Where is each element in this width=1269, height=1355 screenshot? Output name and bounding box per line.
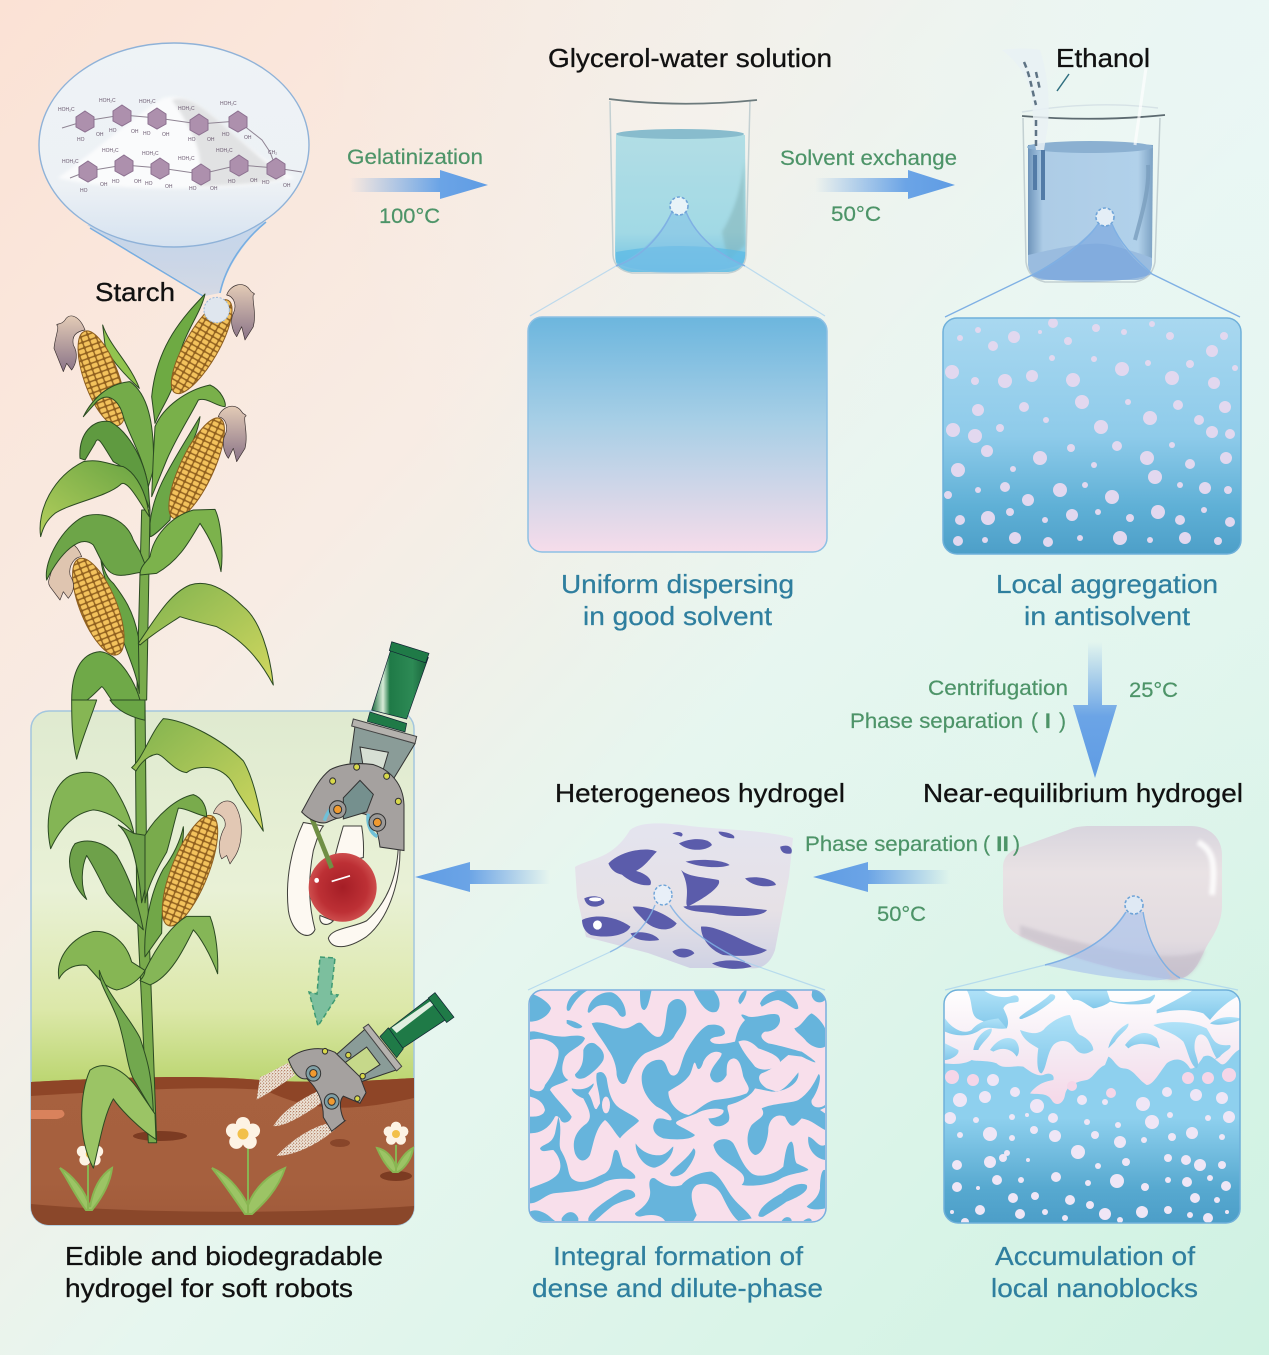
label: 50°C: 50°C <box>831 203 881 226</box>
label: Phase separation I: Phase separation <box>850 710 1023 733</box>
starch molecule chain top <box>58 98 302 178</box>
corn silks <box>49 285 255 600</box>
beaker: glycerol-water <box>609 99 757 273</box>
starch molecule chain bottom: HOH₂C <box>142 151 159 157</box>
plate <box>352 719 417 744</box>
starch molecule chain bottom: OH <box>283 183 291 189</box>
starch molecule chain top: HOH₂C <box>178 106 195 112</box>
label: Near-equilibrium hydrogel: Near-equilibrium hydrogel <box>923 778 1243 808</box>
cherry <box>309 814 377 922</box>
white soft fingers <box>287 822 400 947</box>
label: Starch: Starch <box>95 277 175 307</box>
label: Ethanol <box>1056 43 1150 91</box>
panel: integral formation <box>529 990 826 1222</box>
starch molecule chain bottom: HO <box>262 180 270 186</box>
panel: accumulation of nanoblocks <box>943 988 1242 1226</box>
beaker: ethanol <box>1002 48 1165 282</box>
plate <box>363 1024 402 1071</box>
label: Integral formation of dense and dilute-phase <box>532 1241 823 1303</box>
starch molecule chain top: HO <box>188 137 196 143</box>
starch molecule chain top: HOH₂C <box>99 98 116 104</box>
lower plant (stalk, leaves, ear) <box>48 700 263 1168</box>
starch molecule chain bottom: HOH₂C <box>178 156 195 162</box>
starch molecule chain bottom: OH <box>250 178 258 184</box>
arrow: phase separation II <box>813 862 950 892</box>
label: 25°C: 25°C <box>1129 679 1178 702</box>
label: Local aggregation in antisolvent: in antisolvent <box>1024 601 1191 631</box>
starch molecule chain bottom: HO <box>145 181 153 187</box>
starch molecule chain bottom: OH <box>134 179 142 185</box>
callout cone: beaker 1 to panel <box>530 197 825 316</box>
near-equilibrium gel cube <box>945 826 1238 990</box>
starch molecule chain top: HO <box>109 128 117 134</box>
starch molecule chain bottom: HOH₂C <box>62 159 79 165</box>
dashed green arrow down <box>309 957 338 1026</box>
gripper body <box>288 1028 397 1131</box>
robot gripper in soil <box>257 993 454 1156</box>
label: Integral formation of dense and dilute-phase: dense and dilute-phase <box>532 1273 823 1303</box>
label: Local aggregation in antisolvent: Local aggregation <box>996 569 1218 599</box>
label: Phase separation II: Phase separation <box>805 833 978 856</box>
label: Heterogeneos hydrogel: Heterogeneos hydrogel <box>555 778 845 808</box>
label: Uniform dispersing in good solvent: in good solvent <box>583 601 773 631</box>
starch molecule chain top: HO <box>77 137 85 143</box>
arrow: down to near-equilibrium <box>1073 642 1117 778</box>
ethanol pour stream <box>1002 48 1049 150</box>
starch molecule chain top: HOH₂C <box>220 101 237 107</box>
label: Edible and biodegradable hydrogel for soft robots: Edible and biodegradable <box>65 1241 383 1271</box>
panel: uniform dispersing <box>528 317 827 552</box>
starch molecule chain bottom: HOH₂C <box>102 148 119 154</box>
panel: local aggregation <box>943 318 1241 554</box>
label: Accumulation of local nanoblocks: Accumulation of <box>995 1241 1196 1271</box>
panel: robot scene background <box>31 711 414 1225</box>
starch magnified bubble <box>39 43 309 296</box>
label: Phase separation I: I <box>1045 710 1051 733</box>
starch molecule chain top: OH <box>207 137 215 143</box>
label: Phase separation I: ( <box>1031 710 1038 733</box>
upper leaves <box>40 382 273 700</box>
starch molecule chain bottom: OH <box>100 182 108 188</box>
upper plant (stalk, leaves, ears) <box>40 285 273 700</box>
green tube <box>380 993 454 1058</box>
starch molecule chain top: HOH₂C <box>139 99 156 105</box>
green tube <box>367 642 429 732</box>
starch molecule chain bottom: HO <box>189 186 197 192</box>
label: Phase separation II: ( <box>983 833 990 856</box>
callout cone: beaker 2 to panel <box>945 208 1240 317</box>
label: Uniform dispersing in good solvent <box>561 569 794 631</box>
starch molecule chain top: OH <box>244 135 252 141</box>
title: Glycerol-water solution: Glycerol-water solution <box>548 43 832 73</box>
arrow: solvent exchange <box>815 170 955 199</box>
label: Local aggregation in antisolvent <box>996 569 1218 631</box>
soil <box>31 1077 414 1225</box>
starch molecule chain top: HO <box>143 131 151 137</box>
label: Phase separation I: ) <box>1059 710 1066 733</box>
starch molecule chain bottom: CH₂ <box>268 150 277 156</box>
label: 100°C: 100°C <box>379 205 440 228</box>
label: Accumulation of local nanoblocks <box>991 1241 1198 1303</box>
label: Accumulation of local nanoblocks: local nanoblocks <box>991 1273 1198 1303</box>
starch molecule chain bottom: HO <box>80 188 88 194</box>
corn ear lower <box>151 809 229 932</box>
label: Gelatinization: Gelatinization <box>347 146 483 169</box>
flowers <box>60 1117 413 1214</box>
starch molecule chain bottom: HO <box>228 179 236 185</box>
degrading fingers <box>257 1063 335 1156</box>
corn plant <box>40 285 273 1168</box>
robot gripper holding cherry <box>287 642 429 947</box>
starch molecule chain top: HOH₂C <box>58 107 75 113</box>
starch molecule chain top: HO <box>222 132 230 138</box>
corn ear top left <box>62 292 243 661</box>
arrow: gelatinization <box>350 170 488 199</box>
starch sample spot on ear <box>204 297 229 323</box>
starch molecule chain bottom <box>62 148 291 194</box>
label: Solvent exchange: Solvent exchange <box>780 147 957 170</box>
starch molecule chain top: OH <box>162 132 170 138</box>
label: Phase separation II: ) <box>1013 833 1020 856</box>
label: Centrifugation: Centrifugation <box>928 677 1068 700</box>
gripper body <box>302 726 415 851</box>
label: Edible and biodegradable hydrogel for soft robots <box>65 1241 383 1303</box>
starch molecule chain bottom: HO <box>112 179 120 185</box>
label: Integral formation of dense and dilute-phase: Integral formation of <box>553 1241 804 1271</box>
starch molecule chain bottom: HOH₂C <box>216 148 233 154</box>
label: Phase separation II: II <box>996 833 1009 856</box>
heterogeneous hydrogel block <box>528 823 825 990</box>
starch molecule chain bottom: OH <box>165 184 173 190</box>
label: 50°C: 50°C <box>877 903 926 926</box>
starch molecule chain top: OH <box>96 132 104 138</box>
arrow: to robot panel <box>415 862 550 892</box>
starch powder heap <box>58 97 295 188</box>
starch molecule chain bottom: OH <box>210 186 218 192</box>
label: Edible and biodegradable hydrogel for soft robots: hydrogel for soft robots <box>65 1273 353 1303</box>
label: Ethanol: Ethanol <box>1056 43 1150 73</box>
label: Uniform dispersing in good solvent: Uniform dispersing <box>561 569 794 599</box>
starch molecule chain top: OH <box>131 129 139 135</box>
